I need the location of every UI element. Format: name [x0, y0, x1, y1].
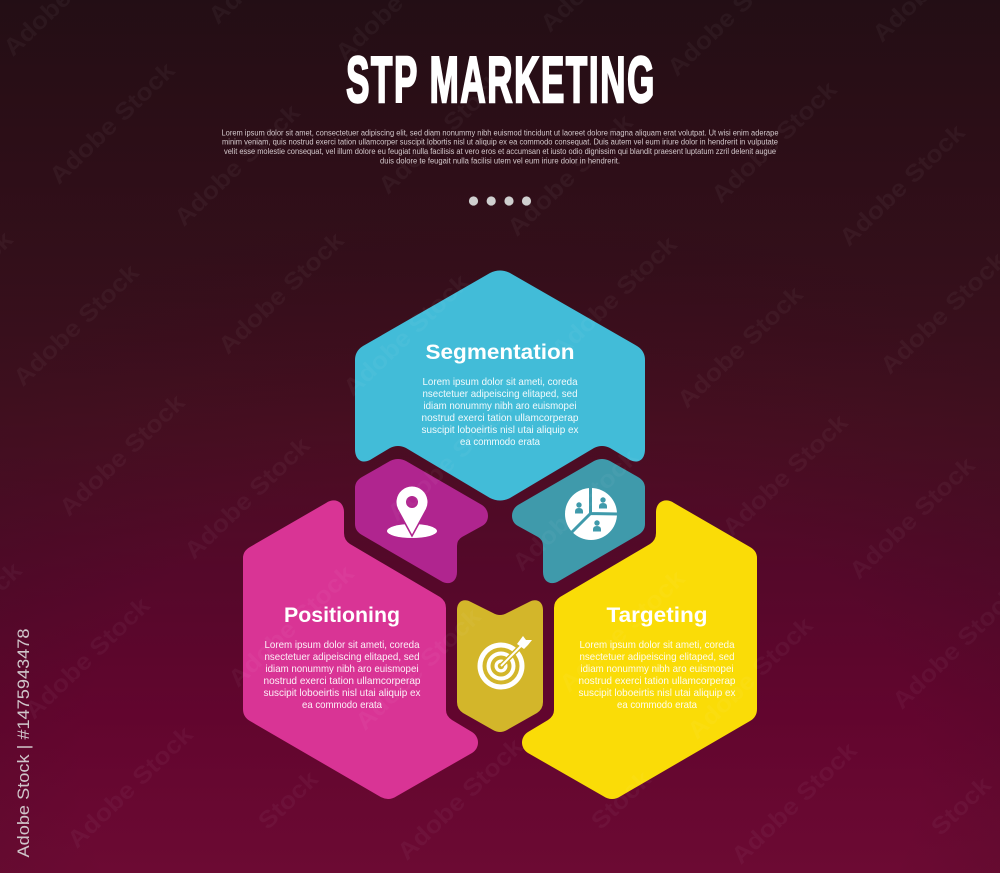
text: targeting body: nostrud exerci tation ullamcorperap	[578, 676, 736, 687]
hexagon: targeting	[522, 500, 757, 799]
small hexagon: positioning icon tile	[355, 459, 488, 583]
text: positioning body: nsectetuer adipeiscing elitaped, sed	[264, 652, 420, 663]
watermark layer: Adobe Stock	[875, 247, 1000, 380]
intro text block: duis dolore te feugait nulla facilisi utem vel eum iriure dolor in hendrerit.	[380, 156, 620, 165]
watermark layer: Stock	[926, 771, 997, 841]
intro text block: minim veniam, quis nostrud exerci tation ullamcorper suscipit lobortis nisl ut aliquip ex ea commodo consequat. Duis autem vel eum iriure dolor in hendrerit in vulputate	[222, 138, 779, 147]
text: targeting body	[578, 640, 736, 711]
watermark layer: Adobe Stock	[338, 269, 475, 402]
text: positioning body: ea commodo erata	[302, 700, 382, 711]
text: targeting body: idiam nonummy nibh aro euismopei	[580, 664, 734, 675]
watermark layer: Adobe Stock	[392, 733, 529, 866]
watermark layer: Adobe Stock	[834, 119, 971, 252]
small hexagon: targeting icon tile	[512, 459, 645, 583]
watermark layer: Adobe Stock	[706, 76, 843, 209]
small hexagon: target icon tile	[457, 600, 543, 732]
watermark layer: Adobe Stock	[54, 389, 191, 522]
watermark layer: Adobe Stock	[44, 57, 181, 190]
heading: targeting: Targeting	[606, 604, 708, 627]
text: targeting body: Lorem ipsum dolor sit ameti, coreda	[580, 640, 735, 651]
watermark layer: Adobe Stock	[179, 432, 316, 565]
intro text block	[222, 128, 779, 165]
text: segmentation body: idiam nonummy nibh aro euismopei	[424, 401, 576, 412]
watermark layer: Adobe Stock	[8, 259, 145, 392]
watermark layer: Adobe Stock	[213, 227, 350, 360]
watermark layer: Adobe Stock	[507, 444, 644, 577]
icon: target with arrow	[478, 636, 532, 690]
text: segmentation body: Lorem ipsum dolor sit ameti, coreda	[422, 377, 578, 388]
stock id label: Adobe Stock | #1475943478	[14, 628, 33, 858]
text: targeting body: nsectetuer adipeiscing elitaped, sed	[580, 652, 735, 663]
icon: pie chart with people	[565, 487, 618, 540]
watermark layer: Adobe Stock	[19, 592, 156, 725]
heading: segmentation: Segmentation	[426, 341, 574, 364]
text: segmentation body: suscipit loboeirtis nisl utai aliquip ex	[422, 425, 579, 436]
text: segmentation body: ea commodo erata	[460, 437, 540, 448]
text: positioning body: idiam nonummy nibh aro euismopei	[266, 664, 418, 675]
watermark layer: Adobe Stock	[554, 565, 691, 698]
watermark layer: Adobe Stock	[726, 737, 863, 870]
watermark layer: Stock	[253, 765, 324, 835]
watermark layer: Adobe Stock	[717, 409, 854, 542]
watermark layer: Adobe Stock	[672, 281, 809, 414]
text: positioning body	[264, 640, 421, 711]
watermark layer: Adobe Stock	[546, 231, 683, 364]
watermark layer: Adobe Stock	[223, 560, 360, 693]
icon: location pin	[387, 486, 437, 538]
text: segmentation body	[422, 377, 579, 448]
hexagon: positioning	[243, 500, 478, 799]
watermark layer: Adobe Stock	[682, 612, 819, 745]
watermark layer: Adobe Stock	[382, 394, 519, 527]
watermark layer: Adobe Stock	[373, 67, 510, 200]
watermark layer: Adobe Stock	[169, 99, 306, 232]
text: segmentation body: nsectetuer adipeiscing elitaped, sed	[422, 389, 578, 400]
watermark layer: Adobe Stock	[62, 721, 199, 854]
heading: positioning: Positioning	[284, 604, 400, 627]
intro text block: Lorem ipsum dolor sit amet, consectetuer adipiscing elit, sed diam nonummy nibh euismod tincidunt ut laoreet dolore magna aliquam erat volutpat. Ut wisi enim aderape	[222, 128, 779, 138]
text: positioning body: Lorem ipsum dolor sit ameti, coreda	[264, 640, 420, 651]
pagination dots	[469, 196, 531, 206]
watermark layer: Adobe Stock	[502, 109, 639, 242]
text: positioning body: suscipit loboeirtis nisl utai aliquip ex	[264, 688, 421, 699]
hexagon: segmentation	[355, 270, 645, 500]
text: targeting body: ea commodo erata	[617, 700, 697, 711]
title: STP MARKETING	[346, 45, 656, 117]
watermark layer: Adobe Stock	[350, 603, 487, 736]
watermark layer: Adobe Stock	[844, 452, 981, 585]
text: targeting body: suscipit loboeirtis nisl utai aliquip ex	[578, 688, 736, 699]
text: positioning body: nostrud exerci tation ullamcorperap	[264, 676, 421, 687]
intro text block: velit esse molestie consequat, vel illum dolore eu feugiat nulla facilisis at vero eros et accumsan et iusto odio dignissim qui blandit praesent luptatum zzril delenit augue	[224, 147, 777, 156]
watermark layer: Stock	[586, 765, 657, 835]
text: segmentation body: nostrud exerci tation ullamcorperap	[422, 413, 579, 424]
